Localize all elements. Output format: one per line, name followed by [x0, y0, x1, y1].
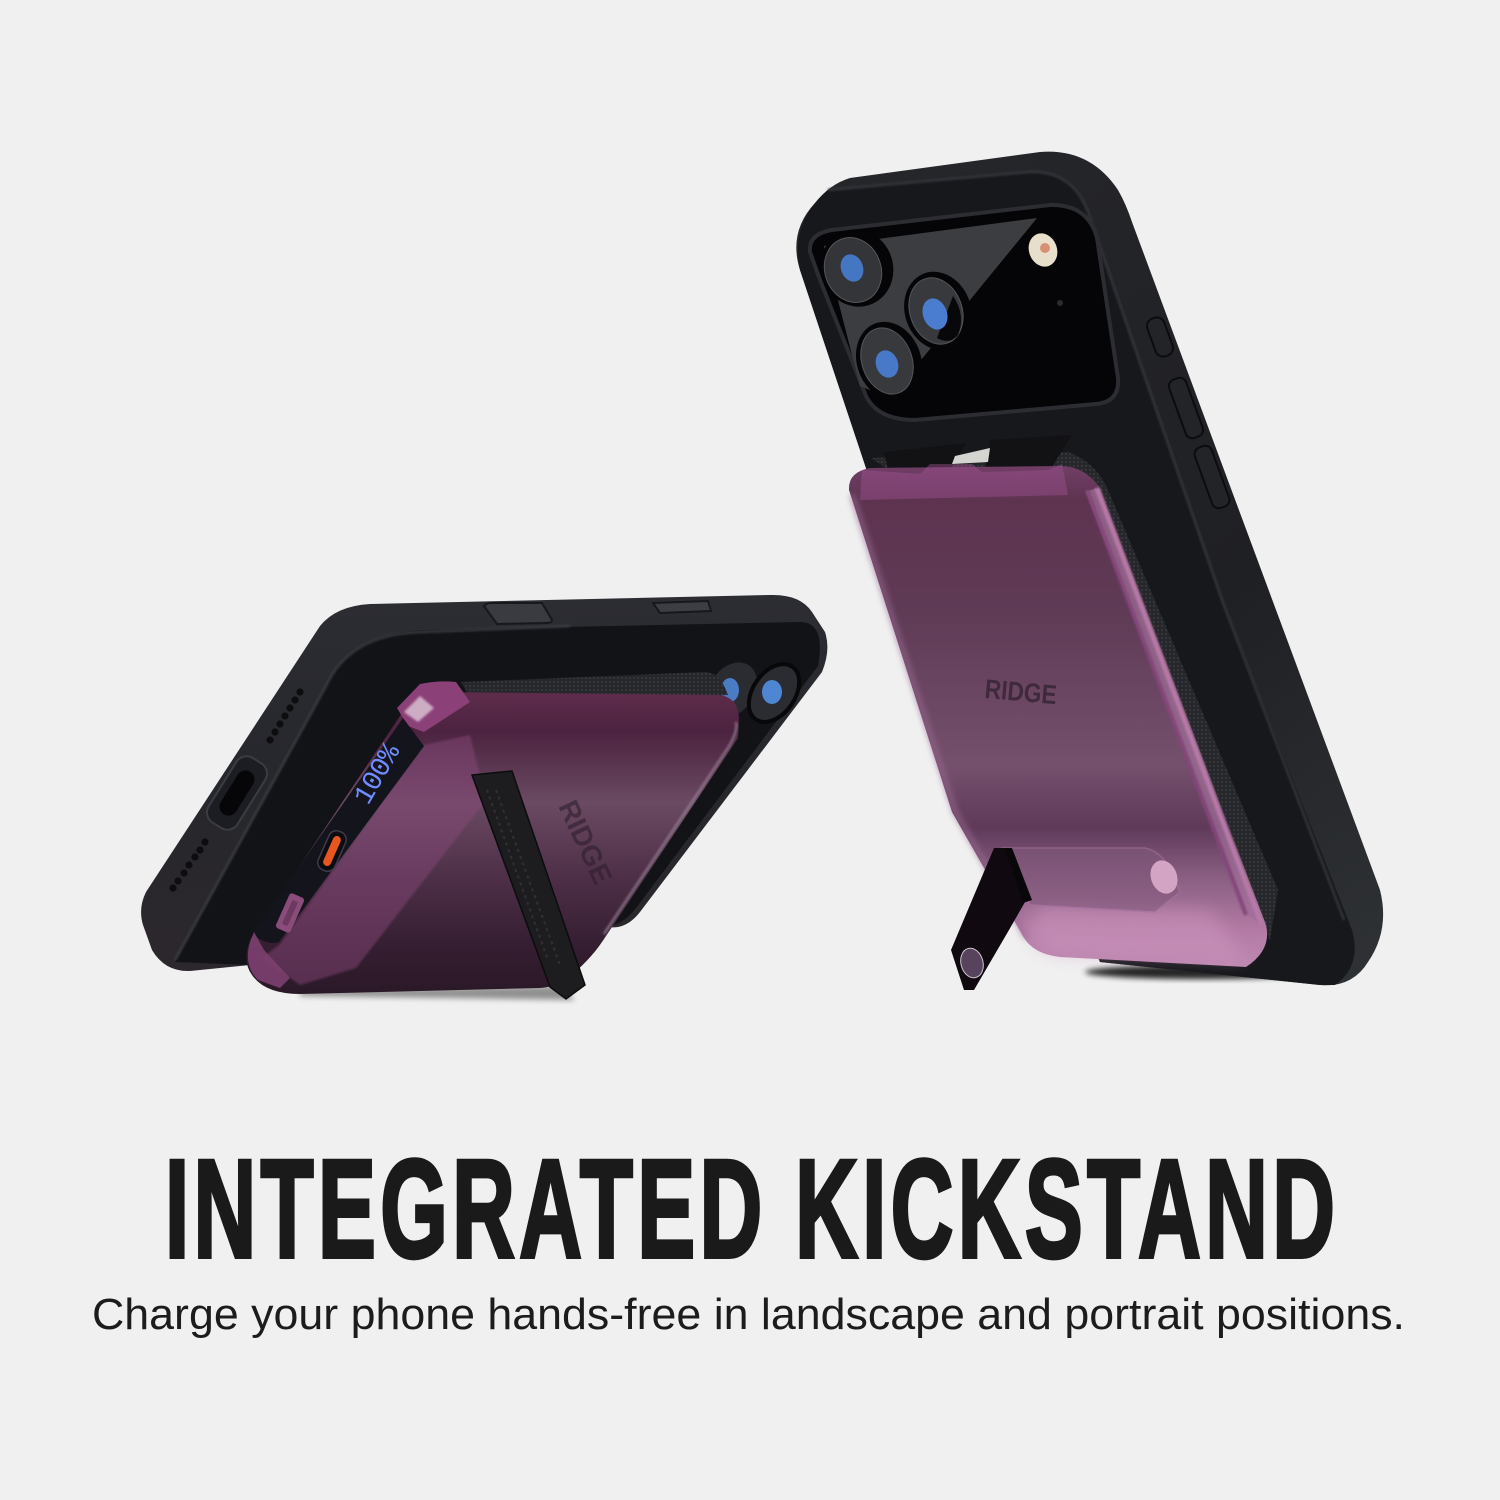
charging port	[202, 752, 272, 834]
secondary port	[275, 892, 305, 934]
phone back panel: landscape	[175, 622, 820, 965]
phone body: portrait	[796, 152, 1383, 985]
power bank body: landscape	[246, 692, 739, 994]
display strip	[252, 718, 424, 943]
lens: middle	[893, 262, 983, 360]
lens: top left	[810, 219, 904, 317]
side buttons: portrait	[1145, 315, 1231, 510]
top connector tabs	[884, 435, 1072, 470]
case contour highlight: landscape	[175, 626, 570, 960]
base glow	[1028, 905, 1245, 960]
phone back panel: portrait	[798, 172, 1355, 985]
translucent pink side band	[262, 735, 486, 985]
translucent left edge	[852, 495, 1027, 938]
kickstand fine print	[487, 790, 560, 965]
corner cap: pink	[397, 681, 470, 732]
fabric back of power bank	[461, 672, 728, 704]
highlight along right edge	[604, 722, 736, 934]
ground shadow: portrait	[1085, 965, 1315, 979]
kickstand: landscape	[472, 771, 585, 999]
battery readout: 100%	[349, 739, 408, 810]
lens: bottom	[845, 312, 933, 410]
flash	[1024, 229, 1062, 271]
ground shadow: landscape	[300, 986, 575, 1000]
subtitle: Charge your phone hands-free in landscape and portrait positions.	[92, 1290, 1405, 1339]
pale band between rails	[1086, 488, 1262, 925]
stand recess	[1002, 848, 1180, 912]
magnet glow	[1146, 857, 1182, 897]
USB-C port	[315, 828, 349, 874]
portrait phone with power bank	[796, 152, 1383, 990]
camera island	[810, 205, 1118, 420]
bottom pink cap	[248, 932, 290, 988]
fabric back of power bank	[871, 452, 1278, 940]
RIDGE logo: RIDGE	[984, 674, 1058, 710]
phone body: landscape	[141, 595, 827, 971]
side buttons: landscape	[484, 601, 711, 624]
bright rail along pack edge	[1097, 488, 1262, 925]
power bank body: portrait	[849, 466, 1267, 967]
case contour highlight: portrait	[828, 172, 1344, 920]
dark rail line	[1087, 490, 1246, 915]
camera lenses: landscape	[697, 653, 810, 731]
top clear cap	[860, 464, 1068, 500]
speaker dots: upper	[266, 688, 304, 744]
glass reflection	[824, 218, 1037, 398]
corner highlight	[404, 696, 434, 722]
microphone dot	[1057, 300, 1063, 306]
kickstand: portrait	[951, 848, 1032, 990]
speaker dots: lower	[169, 838, 209, 892]
landscape phone with power bank	[141, 595, 827, 1000]
title: INTEGRATED KICKSTAND	[165, 1131, 1335, 1287]
RIDGE ghost logo: RIDGE	[553, 795, 618, 889]
